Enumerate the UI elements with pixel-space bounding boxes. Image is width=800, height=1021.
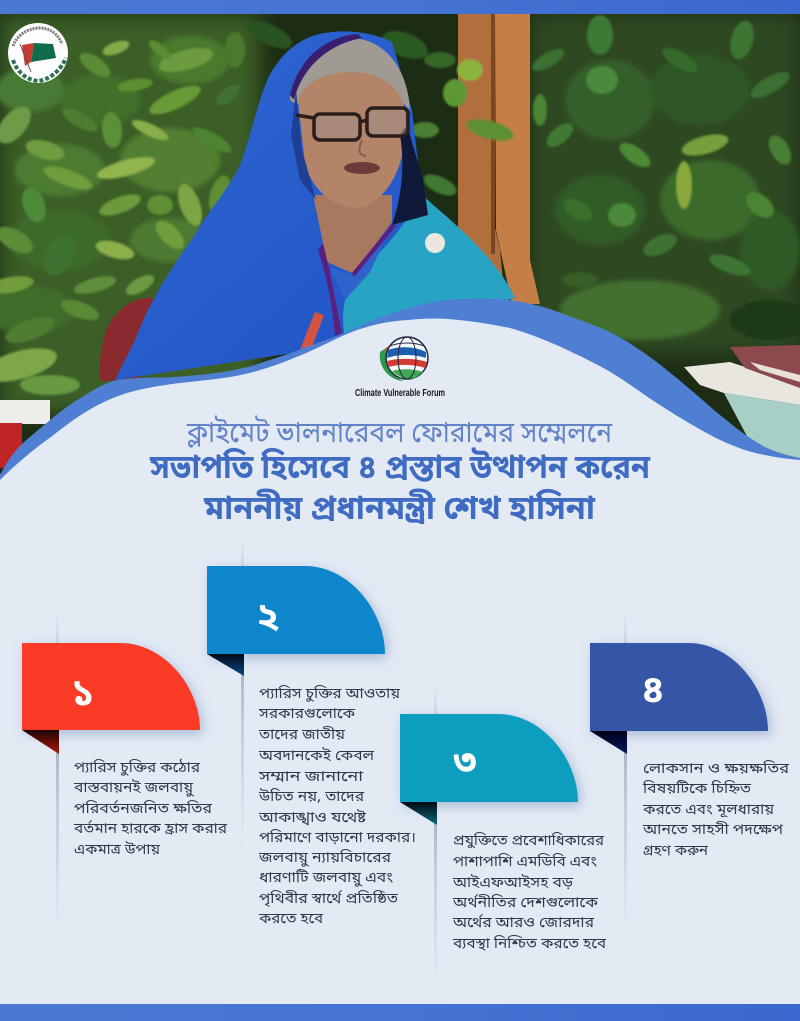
glasses xyxy=(296,108,408,140)
text 2: করতে হবে xyxy=(258,910,323,929)
background foliage xyxy=(0,14,800,474)
blue wave band xyxy=(0,298,800,500)
table with papers and folder xyxy=(0,345,800,470)
text 3: অর্থের আরও জোরদার xyxy=(452,913,594,933)
fold 1 xyxy=(22,730,59,754)
text 2: সরকারগুলোকে xyxy=(258,705,355,724)
text 2: পৃথিবীর স্বার্থে প্রতিষ্ঠিত xyxy=(259,889,399,909)
fold 2 xyxy=(207,654,244,676)
text 4: গ্রহণ করুন xyxy=(643,842,708,861)
Climate Vulnerable Forum logo xyxy=(355,337,445,399)
title line 3: মাননীয় প্রধানমন্ত্রী শেখ হাসিনা xyxy=(203,489,596,533)
pen and badge xyxy=(300,312,324,352)
text 1: বাস্তবায়নই জলবায়ু xyxy=(73,779,195,798)
text 2: প্যারিস চুক্তির আওতায় xyxy=(259,685,401,704)
globe icon xyxy=(380,337,428,381)
panel: proposal 1 xyxy=(22,610,227,935)
red chair xyxy=(100,298,160,381)
title line 2: সভাপতি হিসেবে ৪ প্রস্তাব উত্থাপন করেন xyxy=(149,448,650,492)
face xyxy=(298,72,406,208)
text 2: আকাঙ্খাও যথেষ্ট xyxy=(258,809,366,828)
text 3: ব্যবস্থা নিশ্চিত করতে হবে xyxy=(452,935,606,954)
text 2: জলবায়ু ন্যায়বিচারের xyxy=(258,849,391,868)
person xyxy=(115,31,515,380)
sari body xyxy=(115,31,515,380)
neck and chest xyxy=(313,195,392,273)
text 4: বিষয়টিকে চিহ্নিত xyxy=(642,780,752,799)
ribbon 1 xyxy=(22,643,200,730)
text 3: অর্থনীতির দেশগুলোকে xyxy=(452,893,598,913)
text 4: আনতে সাহসী পদক্ষেপ xyxy=(642,821,784,840)
ribbon 3 xyxy=(400,714,578,802)
panel: proposal 2 xyxy=(207,535,416,929)
text 1: প্যারিস চুক্তির কঠোর xyxy=(74,758,200,778)
party emblem logo xyxy=(8,23,68,83)
text 2: উচিত নয়, তাদের xyxy=(258,788,364,807)
ribbon 2 xyxy=(207,566,385,654)
text 3 xyxy=(452,832,606,954)
hair xyxy=(290,38,410,110)
photo: speaker in garden xyxy=(0,14,800,474)
text 2: সম্মান জানানো xyxy=(258,768,363,787)
text 1: একমাত্র উপায় xyxy=(74,841,161,860)
fold 4 xyxy=(590,731,627,754)
panel: proposal 3 xyxy=(400,685,606,990)
number 1: ১ xyxy=(71,670,95,721)
fold 3 xyxy=(400,802,437,825)
title line 1: ক্লাইমেট ভালনারেবল ফোরামের সম্মেলনে xyxy=(186,415,612,454)
text 4: করতে এবং মূলধারায় xyxy=(642,801,775,820)
text 2 xyxy=(258,685,416,929)
text 2: তাদের জাতীয় xyxy=(258,726,346,745)
text 4: লোকসান ও ক্ষয়ক্ষতির xyxy=(643,760,789,779)
text 4 xyxy=(642,760,789,861)
scarf shadow xyxy=(392,125,428,225)
text 3: পাশাপাশি এমডিবি এবং xyxy=(453,853,598,872)
ribbon 4 xyxy=(590,643,768,731)
light panel wave xyxy=(0,318,800,1021)
text 3: প্রযুক্তিতে প্রবেশাধিকারের xyxy=(453,832,604,851)
text 1: বর্তমান হারকে হ্রাস করার xyxy=(73,819,227,839)
forum name: Climate Vulnerable Forum xyxy=(355,387,445,399)
panel: proposal 4 xyxy=(590,610,789,935)
bottom bar xyxy=(0,1004,800,1021)
title xyxy=(149,415,650,533)
text 2: ধারণাটি জলবায়ু এবং xyxy=(259,869,394,888)
text 2: পরিমাণে বাড়ানো দরকার। xyxy=(259,829,416,848)
text 1: পরিবর্তনজনিত ক্ষতির xyxy=(74,799,212,819)
turquoise shoulder xyxy=(343,195,515,340)
text 3: আইএফআইসহ বড় xyxy=(452,874,574,893)
top bar xyxy=(0,0,800,14)
wooden posts xyxy=(443,14,540,304)
nose and mouth xyxy=(359,140,366,156)
number 2: ২ xyxy=(256,594,280,645)
text 2: অবদানকেই কেবল xyxy=(258,747,374,766)
number 4: ৪ xyxy=(641,667,665,718)
number 3: ৩ xyxy=(453,739,477,790)
text 1 xyxy=(73,758,227,860)
